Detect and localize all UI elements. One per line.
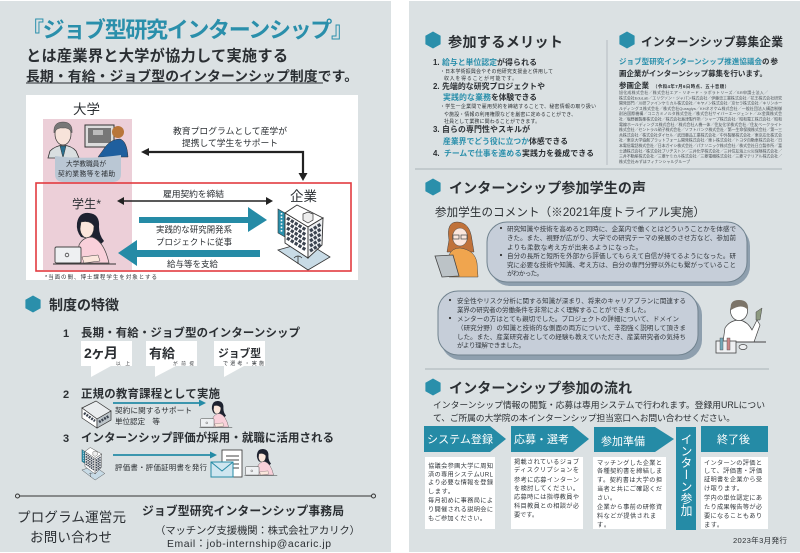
arrow: support bbox=[113, 400, 206, 406]
callout: job type bbox=[214, 341, 265, 377]
footnote: *当面の間、博士課程学生を対象とする bbox=[45, 273, 157, 281]
callout: university staff note: 契約業務等を補助 bbox=[58, 169, 115, 178]
subheading: comments: 参加学生のコメント（※2021年度トライアル実施） bbox=[435, 205, 705, 219]
contact label bbox=[17, 510, 126, 545]
text box: preparation: す。 bbox=[597, 522, 610, 529]
contact label: プログラム運営元 bbox=[17, 510, 126, 525]
merit 4: 実践力を養成できる bbox=[522, 148, 594, 158]
text: flow intro: インターンシップ情報の閲覧・応募は専用システムで行われます。登録用URLについ bbox=[433, 399, 765, 410]
text box: application: 要です。 bbox=[514, 512, 538, 519]
contact details: （マッチング支援機関：株式会社アカリク） bbox=[155, 524, 360, 537]
text box: after completion: 要になることもあり bbox=[704, 513, 762, 520]
text box: preparation: 企業から事前の研修資 bbox=[597, 503, 662, 511]
contact label: お問い合わせ bbox=[30, 530, 112, 545]
text box: system registration: より必要な情報を登録 bbox=[428, 478, 494, 486]
step: application: 応募・選考 bbox=[514, 433, 569, 446]
merit 2: 先端的な研究プロジェクトや bbox=[442, 81, 545, 91]
heading: participating companies: 参画企業 bbox=[619, 80, 650, 90]
feature 1: 1 bbox=[63, 328, 69, 340]
bubble: comment 1: よりも柔軟な考え方が出来るようになった。 bbox=[507, 242, 642, 252]
text: evaluation: 評価書・評価証明書を発行 bbox=[115, 463, 208, 472]
text box: after completion: ます。 bbox=[704, 522, 723, 529]
text box: preparation: 当者と共にご確認くだ bbox=[597, 485, 662, 493]
merit 3: 産業界でどう役に立つか bbox=[443, 136, 529, 146]
callout: paid: 有給 bbox=[149, 346, 175, 361]
bubble: comment 2: メンターの方はとても親切でした。プロジェクトの詳細について、ドメイン bbox=[457, 314, 679, 323]
text box: application: 掲載されているジョブ bbox=[514, 458, 579, 466]
feature 2: 正規の教育課程として実施 bbox=[81, 386, 221, 400]
step: after completion bbox=[701, 426, 768, 452]
merit 3 bbox=[433, 124, 568, 146]
arrow: employment contract bbox=[117, 197, 273, 205]
merit 1 bbox=[433, 57, 553, 82]
heading: merits: 参加するメリット bbox=[448, 34, 563, 51]
text box: system registration: します。 bbox=[428, 488, 454, 496]
feature 3 bbox=[63, 430, 334, 480]
callout: 2 months bbox=[81, 341, 132, 377]
text box: after completion: 学内の単位認定にあ bbox=[704, 494, 762, 502]
text box: system registration: 済の専用システムURL bbox=[428, 470, 494, 478]
text box: application bbox=[511, 457, 583, 529]
text box: application: 科目教員との相談が必 bbox=[514, 502, 579, 510]
merit 2: 社員として業務に関わることができます。 bbox=[444, 118, 540, 125]
callout: paid: が前提 bbox=[173, 360, 194, 367]
text box: preparation: 各種契約書を締結しま bbox=[597, 467, 662, 475]
merit 2: 2. bbox=[433, 82, 440, 91]
bubble: comment 1 bbox=[487, 222, 750, 286]
callout: university staff note bbox=[55, 155, 121, 182]
bubble: comment 1: 研究知識や技術を高めると同時に、企業内で働くとはどういうことかを体感で bbox=[507, 224, 736, 233]
text: company list: 耐治国際機構／コニカミノルタ株式会社／株式会社サイバーエージェント／JX金属株式会 bbox=[619, 111, 782, 116]
heading: recruiting companies: インターンシップ募集企業 bbox=[641, 35, 783, 49]
text: company list: 株式会社／セントラル硝子株式会社／ソフトバンク株式会社／第一生命保険株式会社／第一三 bbox=[619, 127, 782, 132]
title: 『ジョブ型研究インターンシップ』 bbox=[22, 18, 353, 42]
merit 2: 実践的な業務 bbox=[443, 92, 491, 102]
bubble: comment 2: した。また、産業研究者としての経験も教えていただき、産業研究者の気持ち bbox=[457, 332, 686, 341]
section: recruiting companies bbox=[619, 32, 783, 164]
panel: left page background bbox=[0, 1, 391, 552]
feature 2: 2 bbox=[63, 389, 69, 401]
panel: right page background bbox=[409, 1, 800, 552]
text: support: 単位認定 等 bbox=[115, 416, 160, 426]
text: council intro: ジョブ型研究インターンシップ推進協議会 bbox=[619, 56, 762, 66]
merit 1: 給与と単位認定 bbox=[442, 57, 497, 67]
callout: paid bbox=[146, 341, 197, 377]
icon: company building bbox=[278, 205, 330, 270]
text: employment contract: 雇用契約を締結 bbox=[163, 188, 224, 199]
label: company: 企業 bbox=[290, 189, 318, 204]
merit 1: ・日本学術振興会やその他研究支援金と併用して bbox=[440, 68, 553, 75]
text: company list: 株式会社EduLab／エリクソン・ジャパン株式会社／伊藤忠工業株式会社／花王株式会社研究 bbox=[619, 95, 782, 100]
section: student voices bbox=[425, 178, 766, 360]
merit 2: を体験できる bbox=[491, 92, 537, 102]
text: company list: 電線ホールディングス株式会社／株式会社人機一体／住友化学株式会社／住友ベークライト bbox=[619, 122, 782, 127]
text: flow intro bbox=[433, 399, 765, 423]
text box: after completion: して、評価書・評価 bbox=[704, 467, 762, 475]
callout: 2 months: 以上 bbox=[116, 360, 130, 366]
bubble: comment 1: がわかった。 bbox=[507, 268, 543, 278]
text: company list: 株式会社みずほフィナンシャルグループ bbox=[619, 159, 690, 164]
merit 3: 自らの専門性やスキルが bbox=[442, 124, 530, 134]
step: system registration bbox=[424, 426, 506, 452]
contact details: ジョブ型研究インターンシップ事務局 bbox=[142, 504, 344, 518]
red frame: student and company bbox=[36, 183, 351, 271]
text box: preparation: 料などが提供されま bbox=[597, 512, 656, 520]
text box: after completion: け取ります。 bbox=[704, 486, 743, 492]
feature 1 bbox=[63, 326, 301, 377]
bubble: comment 1: 自分の長所と短所を外部から評価してもらえて自信が持てるようになった。研 bbox=[507, 251, 736, 260]
text box: after completion: インターンの評価と bbox=[704, 459, 762, 467]
text: company list: 三井不動産株式会社／三菱ケミカル株式会社／三菱電機株式会社／三菱マテリアル株式会社／ bbox=[619, 154, 782, 159]
icon: student with laptop bbox=[53, 213, 116, 264]
arrow: research project bbox=[139, 207, 267, 232]
merit 3: 体感できる bbox=[529, 136, 568, 146]
heading: recruiting companies bbox=[619, 32, 783, 49]
feature 1: 長期・有給・ジョブ型のインターンシップ bbox=[81, 326, 301, 340]
subtitle: とは産業界と大学が協力して実施する bbox=[26, 47, 288, 65]
callout: university staff note: 大学教職員が bbox=[66, 159, 106, 168]
text: company list: 士通株式会社／株式会社ブリヂストン／三井化学株式会社／三井住友海上火災保険株式会社／ bbox=[619, 148, 782, 153]
text box: system registration bbox=[425, 457, 495, 529]
text box: application: 応募時には指導教員や bbox=[514, 493, 579, 501]
text box: preparation: マッチングした企業と bbox=[597, 459, 662, 467]
text: support: 契約に関するサポート bbox=[115, 405, 192, 415]
icon: company bbox=[82, 448, 105, 480]
feature 3: 3 bbox=[63, 433, 69, 445]
text: council intro bbox=[619, 56, 778, 78]
text box: after completion: たり成果報告等が必 bbox=[704, 503, 762, 511]
bubble: comment 1: 究に必要な技術や知識、考え方は、自分の専門分野以外にも繋がっていること bbox=[507, 260, 736, 269]
merit 2: ・学生一企業間で雇用契約を締結することで、秘密情報の取り扱い bbox=[440, 103, 596, 110]
bubble: comment 2: 安全性やリスク分析に関する知識が深まり、将来のキャリアプランに関連する bbox=[457, 296, 686, 305]
text: salary: 給与等を支給 bbox=[167, 259, 218, 269]
text box: after completion bbox=[701, 457, 768, 529]
step: preparation: 参加準備 bbox=[601, 434, 645, 448]
step: after completion: 終了後 bbox=[717, 432, 750, 446]
subtitle: 長期・有給・ジョブ型のインターンシップ制度です。 bbox=[26, 68, 358, 84]
text box: system registration: もご参加ください。 bbox=[428, 514, 486, 522]
icon: staff at computer bbox=[85, 125, 128, 157]
contact details: Email：job-internship@acaric.jp bbox=[167, 539, 331, 550]
section: merits bbox=[425, 32, 596, 158]
divider bbox=[16, 494, 376, 498]
text: council intro: の参 bbox=[762, 56, 778, 66]
subtitle bbox=[26, 47, 358, 84]
text: research project: 実践的な研究開発系 bbox=[156, 224, 233, 234]
panel: program diagram bbox=[26, 95, 358, 281]
text: company list: 社／東京大学協創プラットフォーム開発株式会社／東レ株式会社／トヨタ自動車株式会社／日 bbox=[619, 138, 782, 143]
icon: scientist bbox=[716, 300, 766, 353]
heading: features: 制度の特徴 bbox=[49, 297, 119, 313]
heading: participation flow: インターンシップ参加の流れ bbox=[449, 380, 632, 396]
heading: merits bbox=[425, 32, 563, 51]
text box: preparation bbox=[593, 457, 666, 529]
icon: woman with tablet bbox=[435, 222, 478, 277]
icon: student bbox=[244, 449, 277, 476]
merit 2 bbox=[433, 81, 596, 125]
issue date: 2023年3月発行 bbox=[733, 535, 787, 545]
merit 1: 収入を得ることが可能です。 bbox=[444, 75, 517, 82]
text: support bbox=[115, 405, 192, 426]
arrow: salary bbox=[118, 240, 260, 266]
step: internship: インターン参加 bbox=[679, 433, 693, 517]
merit 4 bbox=[433, 148, 594, 158]
text: program support bbox=[173, 125, 287, 148]
merit 1: 1. bbox=[433, 58, 440, 67]
bubble: comment 1: きた。また、視野が広がり、大学での研究テーマの発展のさせ方など、参加前 bbox=[507, 233, 736, 242]
merit 2: や施設・情報の利用権限などを厳密に定めることができ、 bbox=[444, 111, 576, 118]
merit 1: が得られる bbox=[497, 57, 537, 67]
step: preparation bbox=[594, 427, 674, 452]
text box: preparation: さい。 bbox=[597, 495, 616, 502]
step: application bbox=[511, 426, 589, 452]
icon: student bbox=[199, 401, 232, 428]
text box: application: を検討してください。 bbox=[514, 484, 579, 492]
text box: system registration: 協議会参画大学に周知 bbox=[428, 462, 493, 470]
arrow: university to company bbox=[141, 148, 308, 181]
label: university: 大学 bbox=[73, 102, 100, 117]
merit 4: チームで仕事を進める bbox=[444, 148, 522, 158]
text: program support: 提携して学生をサポート bbox=[182, 137, 278, 148]
contact details bbox=[142, 504, 360, 550]
arrow: evaluation bbox=[113, 452, 217, 458]
merit 4: 4. bbox=[433, 149, 440, 158]
text: company list: 共株式会社／株式会社ダイセル／武田薬品工業株式会社／中外製薬株式会社／東京応化株式会 bbox=[619, 132, 782, 137]
bubble: comment 2 bbox=[438, 291, 702, 360]
icon: school bbox=[82, 401, 111, 428]
step: system registration: システム登録 bbox=[427, 432, 493, 446]
feature 2 bbox=[63, 386, 232, 428]
text box: preparation: す。契約書は大学の担 bbox=[597, 476, 662, 484]
heading: participating companies bbox=[619, 80, 729, 90]
text: company list bbox=[619, 90, 782, 164]
feature 3: インターンシップ評価が採用・就職に活用される bbox=[81, 430, 334, 444]
callout: job type: ジョブ型 bbox=[218, 346, 261, 360]
text: company list: ルディングス株式会社／株式会社Quraglys／KHネオケム株式会社／一般社団法人構造制御 bbox=[619, 106, 782, 111]
label: student: 学生* bbox=[72, 196, 101, 211]
text: company list: 社／塩野義製薬株式会社／株式会社島津製作所／シャープ株式会社／昭和電工株式会社／昭和 bbox=[619, 116, 782, 122]
text: company list: 旭化成株式会社／株式会社エア・リキード・ラボラトリーズ／SR申請士法人／ bbox=[619, 90, 768, 95]
text: program support: 教育プログラムとして産学が bbox=[173, 125, 287, 136]
text: research project: プロジェクトに従事 bbox=[156, 237, 232, 247]
text box: system registration: り開催される説明会に bbox=[428, 506, 493, 514]
text: flow intro: て、ご所属の大学院の本インターンシップ担当窓口へお問い合わせください。 bbox=[433, 412, 735, 423]
callout: 2 months: 2ヶ月 bbox=[84, 345, 118, 361]
heading: student voices: インターンシップ参加学生の声 bbox=[449, 180, 646, 196]
section: participation flow bbox=[424, 378, 787, 545]
icon: professor bbox=[48, 122, 79, 158]
text box: after completion: 証明書を企業から受 bbox=[704, 476, 762, 484]
heading: participating companies: （令和4年7月6日時点、五十音順） bbox=[653, 83, 729, 90]
merit 3: 3. bbox=[433, 125, 440, 134]
text box: application: ディスクリプションを bbox=[514, 466, 579, 474]
text: council intro: 画企業がインターンシップ募集を行います。 bbox=[619, 68, 767, 78]
bubble: comment 2: 業界の研究者の労働条件を非常によく理解することができました。 bbox=[457, 305, 650, 314]
text box: system registration: 毎月初めに事務局によ bbox=[428, 496, 493, 504]
text: company list: 本電信電話株式会社／日本ガイシ株式会社／パナソニック株式会社／株式会社日立製作所／富 bbox=[619, 143, 782, 148]
text box: application: 参考に応募インターン bbox=[514, 476, 579, 484]
step: internship bbox=[676, 427, 696, 530]
heading: features bbox=[25, 296, 119, 313]
icon: document and envelope bbox=[211, 450, 242, 477]
callout: job type: で選考・実施 bbox=[223, 360, 264, 367]
text: company list: 開発部門／川研ファインケミカル株式会社／キヤノン株式会社／京セラ株式会社／キリンホー bbox=[619, 101, 782, 106]
text: research project bbox=[156, 224, 233, 247]
bubble: comment 2: （研究分野）の知識と技術的な側面の両方について、辛抱強く説明して頂きま bbox=[457, 323, 686, 332]
bubble: comment 2: がより理解できました。 bbox=[457, 340, 525, 350]
